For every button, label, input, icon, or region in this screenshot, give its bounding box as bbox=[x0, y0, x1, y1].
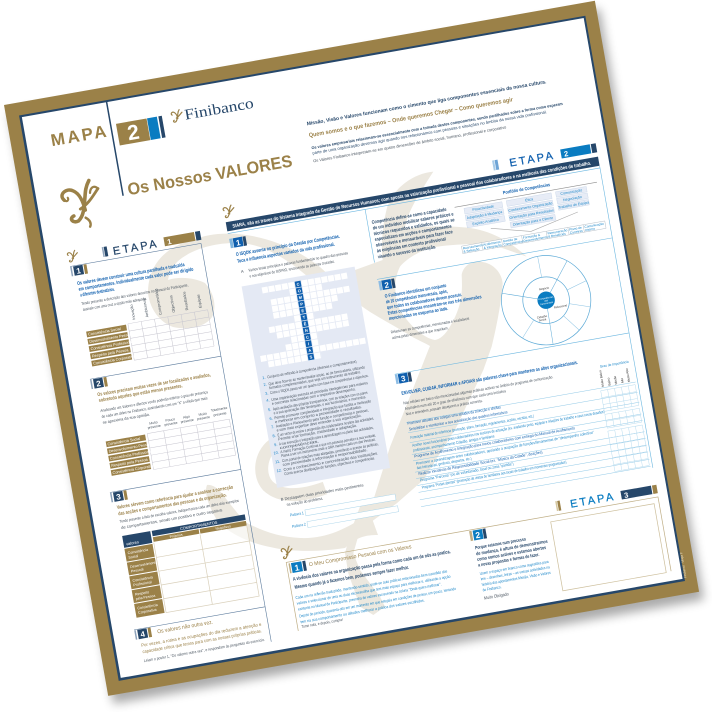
crossword clues: Com o conhecimento e concretização das instituições. bbox=[283, 450, 379, 472]
row labels bbox=[86, 324, 137, 367]
crossword clues: Conjunto de reflexão à competência (diversas e comportamentos) bbox=[267, 359, 357, 379]
panel: competences section 2: Relacionam as competências, mencionadas e localizáveis bbox=[390, 316, 470, 334]
etapa 1 header: 1 bbox=[166, 237, 172, 246]
presence column headers: Muito bbox=[198, 411, 207, 417]
panel: etapa 1 section 3: Valores sérvem como referência para ajudar a analisar a correcção bbox=[116, 485, 234, 511]
question B and keyword fields: Palavra 2 bbox=[292, 521, 307, 529]
panel: etapa 1 section 1: 1 bbox=[76, 266, 82, 276]
panel: personal commitment: tem na sua comportamento ou atitudes melhorar a prática dos valores escolhidos. bbox=[300, 598, 425, 624]
panel: etapa 1 section 4: capacidade crítica que temos para com as nossas próprias práticas. bbox=[142, 628, 262, 654]
panel: glossary crossword: e nos objectivos do SISPRO, rescrevendo as palavras cruzadas. bbox=[249, 259, 335, 279]
panel: glossary crossword: Toca e influencia aspectos variados da vida profissional. bbox=[237, 242, 336, 265]
chart: competence wheel: transversais bbox=[540, 301, 554, 306]
panel: personal commitment: 1 bbox=[294, 562, 300, 573]
crossword clues: Permite criar formação, criatividade e adaptação. bbox=[278, 423, 357, 441]
portfolio box labels: Orientação para o Cliente bbox=[512, 216, 553, 227]
column labels: Resultados bbox=[182, 291, 189, 311]
column labels: Ambiciosos bbox=[142, 298, 150, 318]
presence column headers: presente bbox=[147, 424, 161, 430]
panel: etapa 1 section 4 bbox=[134, 608, 265, 664]
crossword letters: T bbox=[302, 314, 306, 320]
header: mapa label: MAPA bbox=[49, 122, 108, 150]
competence definition text: técnicos requeridos e validados, os quais se bbox=[373, 217, 455, 237]
row labels: Consistência Corporativa bbox=[112, 464, 156, 475]
crossword clues: Passa a ser um instrumento onde a GRH mantém cada um das Pessoas. bbox=[281, 437, 376, 458]
panel: etapa 1 section 1: em comportamentos. Individualmente cada valor pode ser dirigido bbox=[78, 267, 194, 293]
panel: personal commitment: O Meu Compromisso Pessoal com os Valores bbox=[309, 544, 412, 568]
behaviours table: COMPORTAMENTOS bbox=[180, 521, 218, 531]
panel: etapa 1 section 4: Leiam o poster 1, "Os valores outra vez", e respondam às perguntas do exercício. bbox=[143, 637, 265, 663]
chart: competence portfolio: Comunicação bbox=[584, 222, 604, 229]
panel: etapa 1 section 4: Os valores não outra vez. bbox=[157, 620, 214, 635]
header divider bbox=[106, 101, 124, 196]
panel: glossary crossword: 1 bbox=[235, 238, 242, 248]
panel: etapa 1 section 3: 3 bbox=[116, 492, 122, 502]
panel: section 3 importance grid: Nos e entendem, possam desejarem a prática concreta. bbox=[405, 398, 483, 416]
competence definition text: Competência define-se como a capacidade bbox=[371, 207, 447, 226]
crossword clues: 11. bbox=[275, 458, 281, 464]
portfolio box labels: Adaptação à Mudança bbox=[466, 210, 502, 220]
practice list: Acolher novos funcionários pelos colaboradores nos sectores de actuação (ex. avaliando perto, equipas e relações de trabalho e seus novos desafios) bbox=[412, 409, 605, 448]
panel: personal commitment: Mesmo quando já o fazemos bem, podemos sempre fazer melhor. bbox=[294, 565, 410, 591]
panel: closing message: como somos activos e estamos abertos bbox=[477, 545, 547, 562]
panel: etapa 1 section 2: sobretudo aqueles que estão menos presentes. bbox=[98, 383, 184, 404]
row labels: Desenvolvimento Pessoal bbox=[108, 442, 152, 454]
crossword letters: I bbox=[308, 341, 310, 346]
panel: section 3 importance grid: ENVOLVER, CUIDAR, INFORMAR e APOIAR são palavras chave para manterem os altos organizacionais. bbox=[401, 360, 579, 397]
competence definition text bbox=[371, 206, 459, 260]
title: Os Nossos VALORES bbox=[126, 151, 294, 199]
chart: competence portfolio: Desenvolvimento bbox=[523, 235, 548, 243]
HR process tabs bbox=[461, 221, 606, 254]
panel: etapa 1 section 2 bbox=[90, 357, 236, 478]
chart: competence portfolio: Portfólio de Competências bbox=[502, 182, 551, 195]
presence column headers: Algo bbox=[183, 414, 190, 420]
panel: etapa 1 section 3 bbox=[110, 471, 259, 619]
panel: competences section 2: O Finibanco identificou um conjunto bbox=[384, 283, 447, 300]
crossword letters: A bbox=[308, 348, 312, 353]
crossword clues: Conta acerca distribuição de funções, objectivos e competências. bbox=[284, 455, 375, 476]
chart: competence wheel bbox=[494, 248, 598, 352]
panel: closing message bbox=[469, 518, 556, 601]
panel: personal commitment: Cada um na reflexão traduzindo, mantendo-sentido, pode-se auto práticas relacionadas bem sucedido dos bbox=[295, 568, 448, 600]
practice list: das hierarquias, gerência, desportos, etc.) bbox=[416, 456, 472, 470]
panel: closing message: Porque estamos num processo bbox=[475, 537, 526, 550]
panel: closing message: história dos apontamentos Missão, Visão e Valores bbox=[481, 570, 551, 587]
panel: glossary crossword: Vamos testar princípios e palavras fundamentais no quadro das pessoas bbox=[248, 250, 348, 273]
competence definition text: especializam em acções e comportamentos bbox=[374, 224, 452, 243]
crossword background bbox=[242, 267, 390, 488]
panel: personal commitment: valores e seleccionar de uma ou duas microrecolha que tem mais espaço para melhorar e, utilizando a opção bbox=[296, 574, 451, 606]
crossword letters: C bbox=[306, 334, 309, 340]
etapa 2 band: SIARA, são as traves do Sistema Integrado de Gestão de Recursos Humanos; com aposta na valorização profissional e pessoal dos colaboradores e na melhoria das condições de trabalho. bbox=[232, 161, 592, 230]
intro text block bbox=[306, 77, 566, 163]
panel: section 3 importance grid: Médio bbox=[613, 375, 618, 385]
chart: competence wheel: Relacional bbox=[554, 303, 568, 310]
crossword clues: 2. bbox=[263, 382, 267, 387]
panel: section 3 importance grid bbox=[395, 334, 651, 507]
practice list: Promover a aprendizagem entre colaboradores, apoiando a ocupação de funções/ferramentas de "desempenho colectivo" bbox=[416, 430, 595, 466]
panel: personal commitment: Tome nota, e depois, cumpra! bbox=[301, 617, 343, 629]
panel: section 3 importance grid: Assinalem num até 20 o grau de eficiência com que cada uma iniciativa bbox=[404, 388, 507, 411]
row labels: Consistência Social bbox=[88, 327, 121, 337]
intro text block: Quem somos e o que fazemos – Onde queremos Chegar – Como queremos agir bbox=[309, 97, 514, 139]
panel: section 3 importance grid: Nas células em baixo são mencionadas algumas práticas activas no âmbito do programa de comunicação. bbox=[403, 374, 554, 405]
rating cells bbox=[601, 385, 649, 471]
crossword clues: 12. bbox=[276, 467, 282, 473]
column labels: Objectivos bbox=[169, 295, 176, 313]
presence column headers: Totalmente bbox=[211, 406, 228, 413]
practice list: Programa de Acolhimento e Integração para novos colaboradores com entrega do Manual de Acolhimento bbox=[414, 425, 576, 459]
behaviours table: Consistência bbox=[132, 575, 153, 583]
panel: section 3 importance grid: Alto bbox=[620, 377, 625, 384]
panel: etapa 1 section 2: Os valores precisam muitas vezes de ser focalizados e avaliados, bbox=[97, 372, 212, 398]
panel: competences section 2: 2 bbox=[384, 280, 390, 290]
chart: competence wheel: Cidadão bbox=[536, 314, 548, 320]
panel: etapa 1 section 2: de cada um deles no Finibanco, assinalando com um "X" a célula que mais bbox=[101, 395, 208, 419]
portfolio box labels: Comunicação bbox=[560, 188, 583, 196]
column labels bbox=[128, 281, 203, 320]
panel: etapa 1 section 3: Tendo presente a lista de escolha valores, indiquem para cada um deles dois exemplos bbox=[119, 498, 239, 524]
panel: competences section 2 bbox=[378, 264, 487, 341]
grau de importancia header: Grau de Importância bbox=[600, 360, 629, 369]
practice list: Formação material de referência (promoção, plano, formação, regulamentos, acções, escritas, etc.) bbox=[410, 413, 535, 440]
panel: closing message: de mudança, é altura de demonstrarmos bbox=[476, 539, 548, 556]
crossword clues: 8. bbox=[272, 433, 276, 438]
portfolio box labels: Proactividade bbox=[472, 204, 494, 212]
panel: competences section 2: acima pelas dimensões a que respeitam. bbox=[392, 325, 449, 340]
panel: personal commitment: A vivência dos valores na organização passa pela forma como cada um de nós as pratica. bbox=[293, 549, 452, 583]
intro text block: parte de uma organização devemos agir quando nos relacionamos com pessoas e situações no âmbito da nossa vida profissional. bbox=[312, 109, 547, 155]
left column divider bbox=[70, 243, 271, 665]
column labels: Comprometidos bbox=[154, 288, 163, 315]
portfolio box labels bbox=[465, 187, 591, 235]
panel: etapa 1 section 2: Analisando um Valores e dilectos vocês poderão estimar o grau de presença bbox=[100, 389, 209, 413]
etapa 3 header: 3 bbox=[623, 490, 629, 500]
chart: competence portfolio: & Integração bbox=[483, 243, 502, 250]
crossword clues: Permite promover complexidade e integração que facilita a motivação bbox=[274, 398, 371, 420]
icon: large ornament bbox=[60, 179, 104, 230]
row labels: Consistência Profissional bbox=[110, 449, 152, 461]
panel: competences section 2: de 10 competências transversais, após, bbox=[385, 289, 449, 305]
presence grid bbox=[147, 419, 236, 470]
practice list: Programa "Parceria" (ou de voluntariado, local ou zona "partida") bbox=[419, 461, 514, 482]
vertical credit: Finibanco · Mapa 2 bbox=[679, 552, 687, 578]
behaviours table: Desenvolvimento bbox=[130, 560, 158, 569]
etapa 2 header bbox=[492, 142, 598, 173]
panel: closing message: Muito Obrigado bbox=[484, 591, 509, 601]
panel: etapa 1 section 2: se aproxima da sua opinião. bbox=[102, 412, 150, 425]
panel: etapa 1 section 1: Os valores devem construir uma cultura partilhada e traduzida bbox=[77, 262, 185, 287]
notes box bbox=[551, 504, 666, 591]
panel: closing message: a novas propostas e formas de fazer. bbox=[478, 552, 540, 568]
crossword letters bbox=[296, 281, 314, 360]
crossword letters: O bbox=[297, 288, 301, 293]
portfolio boxes bbox=[464, 186, 591, 235]
chart: competence portfolio: Acolhimento bbox=[483, 240, 501, 247]
question B and keyword fields: na solução do problema. bbox=[286, 496, 324, 507]
practice list: Sensibilizar e monitorizar a sua actualização dos quadros informativos bbox=[408, 409, 508, 432]
panel: etapa 1 section 3: de comportamentos, sendo um positivo e outro negativo. bbox=[121, 507, 224, 530]
chart: competence wheel: Social bbox=[538, 317, 547, 322]
intro text block: Missão, Visão e Valores funcionam como o cimento que liga componentes essenciais da nossa cultura. bbox=[306, 79, 547, 127]
chart: competence portfolio: Interna bbox=[585, 227, 595, 232]
question B and keyword fields: B bbox=[280, 496, 284, 502]
crossword clues: Que deve ficar-se ao manter/avaliar acçao, ao de forma aberta, utilizando bbox=[268, 364, 365, 386]
presence column headers: presente bbox=[213, 411, 227, 417]
crossword clues: 7. bbox=[271, 424, 275, 429]
crossword clues: 6. bbox=[269, 416, 273, 421]
crossword clues: 3. bbox=[265, 391, 269, 396]
portfolio box labels: Espírito Analítico bbox=[472, 218, 499, 226]
panel: etapa 1 section 2: 2 bbox=[96, 379, 102, 389]
crossword clues: Uma organização executa as principais intelegências para maiores bbox=[271, 380, 368, 402]
panel: closing message: ime – desenhos, letras – as vossas actividades na bbox=[480, 564, 551, 581]
chart: competence portfolio: Competências bbox=[503, 239, 524, 247]
chart: competence portfolio bbox=[453, 174, 606, 254]
behaviours table bbox=[122, 514, 259, 618]
etapa 2 header: 2 bbox=[563, 149, 569, 159]
panel: closing message: do Finibanco. bbox=[482, 584, 502, 592]
row labels: Desenvolvimento Pessoal bbox=[89, 332, 133, 344]
header: number badge: 2 bbox=[126, 121, 141, 145]
row labels: Consistência Corporativa bbox=[93, 354, 136, 366]
row labels: Consistência Social bbox=[107, 437, 141, 446]
portfolio box labels: Conhecimento Organização bbox=[508, 201, 553, 213]
crossword cells bbox=[249, 274, 367, 366]
presence column headers: presente bbox=[197, 415, 210, 421]
panel: etapa 1 section 1: assinale com uma cruz a opção mais adequada. bbox=[82, 296, 147, 312]
chart: competence portfolio: & Benefícios bbox=[548, 232, 567, 239]
panel: glossary crossword bbox=[229, 218, 399, 532]
panel: glossary crossword: A bbox=[241, 268, 244, 274]
etapa 1 header bbox=[102, 230, 202, 260]
panel: personal commitment: Depois do período, quarenta-oito em um momento em que esteja/a em condições de pensar, em pouco, tentando bbox=[299, 586, 457, 618]
crossword answer column bbox=[298, 281, 311, 360]
column labels: Inovação bbox=[130, 304, 136, 320]
panel: etapa 1 section 4: Por vezes, a rotina e as ocupações do dia reduzem a atenção e bbox=[141, 622, 262, 648]
crossword clues: Após avaliação das próprias transparência, com as relações com os pares bbox=[272, 390, 368, 411]
presence column headers: presente bbox=[164, 421, 178, 427]
behaviours table: Consistência bbox=[127, 548, 148, 555]
crossword letters: C bbox=[296, 281, 300, 287]
behaviours table: Social bbox=[128, 554, 139, 560]
chart: competence portfolio: Carreiras bbox=[569, 229, 583, 235]
panel: personal commitment bbox=[288, 535, 460, 629]
behaviours table: Próprios bbox=[169, 533, 183, 539]
crossword clues: É um vector de ensino e progressão dos colaboradores no plano das actividades. bbox=[277, 416, 374, 437]
chart: competence portfolio: Gestão de bbox=[503, 237, 518, 243]
crossword clues: 10. bbox=[273, 450, 279, 455]
chart: competence portfolio: Remuneração bbox=[547, 228, 568, 236]
watermark: large beige ornament bbox=[148, 172, 527, 615]
row separators bbox=[406, 382, 651, 507]
icon: Finibanco ornament bbox=[171, 109, 183, 122]
behaviours table: Consistência bbox=[137, 603, 158, 610]
panel: section 3 importance grid: 3 bbox=[400, 374, 407, 384]
chart: competence portfolio: Formação & bbox=[523, 233, 541, 240]
behaviours table: Corporativa bbox=[138, 608, 157, 615]
crossword clues: 9. bbox=[274, 442, 278, 447]
crossword clues: e concretas relacionadas com o respectivo desempenho. bbox=[271, 386, 356, 406]
wheel spokes bbox=[497, 249, 596, 352]
chart: competence portfolio: & Selecção bbox=[463, 247, 480, 254]
competence definition text: visando o sucesso da instituição. bbox=[377, 244, 437, 260]
presence column headers: presente bbox=[180, 418, 194, 424]
behaviours table: Respeito bbox=[135, 590, 149, 597]
behaviours table: Negativos bbox=[215, 524, 231, 531]
practice list: profissionais, acompanhamento Cidadão, amigos e familiares bbox=[413, 433, 495, 453]
divider bbox=[90, 356, 265, 630]
portfolio box labels: Ética bbox=[525, 196, 533, 203]
etapa 3 frame bbox=[286, 497, 671, 637]
panel: section 3 importance grid: Baixo bbox=[606, 377, 612, 386]
crossword clues: Como o ISQDK passa ser um quadro com base em competências e objectivos. bbox=[270, 373, 369, 395]
practice list: Programa "Portas abertas" (promoção de visitas de familiares aos locais de trabalho em momentos programados) bbox=[421, 459, 567, 490]
column labels: Equipas bbox=[196, 294, 203, 308]
row labels bbox=[106, 434, 156, 476]
crossword letters: Ê bbox=[303, 321, 307, 327]
etapa 1 header: ETAPA bbox=[112, 238, 158, 258]
crossword letters: E bbox=[301, 308, 305, 313]
crossword letters: N bbox=[304, 328, 308, 333]
panel: glossary crossword: O ISQDK assente no princípio da Gestão por Competências. bbox=[235, 234, 341, 258]
practice list bbox=[407, 387, 613, 490]
crossword clues: e com mais expertise deve entender a sua organização. bbox=[276, 413, 362, 433]
chart: competence wheel: das bbox=[544, 299, 549, 303]
behaviours table: pela Pessoa bbox=[135, 594, 156, 601]
panel: competences section 2: que todos os colaboradores devem possuir. bbox=[386, 292, 462, 311]
row labels: Consistência Profissional bbox=[90, 340, 133, 351]
question B and keyword fields bbox=[280, 477, 399, 531]
matching grid bbox=[128, 310, 214, 360]
icon: small ornament bbox=[223, 205, 235, 218]
chart: competence wheel: Competências bbox=[538, 295, 554, 301]
panel: section 3 importance grid: Muito Baixo bbox=[598, 370, 605, 387]
crossword clues: e a sua apreciação das hierarquias, e aos funcionários, e momentos. bbox=[273, 394, 367, 415]
portfolio connector bbox=[491, 212, 580, 238]
practice list: Promover atitudes dos colegas uma atitudes da Direcção e chefias bbox=[407, 404, 501, 426]
panel: closing message: Usem o espaço em branco como sugestões para bbox=[479, 559, 550, 576]
chart: competence portfolio: Recrutamento bbox=[463, 243, 483, 250]
behaviours table: Pessoal bbox=[131, 567, 144, 574]
wheel labels: Negócio bbox=[539, 286, 550, 291]
panel: section 3 importance grid: Muito Alto bbox=[625, 368, 631, 383]
presence column headers: Pouco bbox=[165, 417, 175, 423]
crossword clues: 4. bbox=[266, 397, 270, 403]
icon: small ornament bbox=[281, 546, 293, 559]
behaviours table: valores bbox=[126, 539, 139, 546]
row labels: Respeito pela Pessoa bbox=[111, 458, 149, 468]
panel: closing message: 2 bbox=[475, 530, 481, 540]
chart: competence portfolio: Plano de bbox=[569, 226, 582, 232]
crossword clues: e melhorar em conjunto a proximidade e resultados. bbox=[275, 404, 362, 424]
portfolio box labels: Orientação para Resultados bbox=[509, 208, 554, 220]
competence definition text: observáveis e mensuráveis para fazer face bbox=[375, 229, 453, 249]
panel: etapa 1 section 3: das acções e comportamentos das pessoas e da organização. bbox=[118, 492, 228, 517]
question B and keyword fields: Destaquem duas prioridades mais pertinentes bbox=[284, 482, 364, 501]
etapa 2 header: ETAPA bbox=[509, 150, 555, 170]
panel: competences section 2: mencionadas no esquema ao lado. bbox=[389, 306, 449, 322]
crossword clues: 5. bbox=[268, 407, 272, 412]
panel: etapa 1 section 1: a diferentes destinatários. bbox=[80, 287, 116, 299]
panel: competences section 2: Estas competências encontram-se nas três dimensões bbox=[387, 294, 482, 317]
row labels: Respeito pela Pessoa bbox=[92, 348, 130, 359]
crossword clues: competências. bbox=[279, 438, 320, 450]
wheel hub bbox=[536, 290, 556, 310]
logo: Finibanco: Finibanco bbox=[183, 96, 255, 124]
crossword letters: S bbox=[309, 354, 313, 360]
intro text block: Os Valores Finibanco interpretam-se em quatro dimensões de âmbito social, humano, profissional e corporativo bbox=[313, 124, 507, 163]
crossword clues: com proximidade à informação e responsabilidade. bbox=[282, 447, 368, 467]
panel: etapa 1 section 4: 4 bbox=[140, 630, 146, 639]
etapa 3 header: ETAPA bbox=[569, 491, 615, 511]
question B and keyword fields: Palavra 1 bbox=[290, 510, 305, 518]
crossword clues: formatos complementados, que seja um instrumento de trabalho. bbox=[269, 369, 361, 390]
crossword letters: M bbox=[298, 294, 303, 300]
portfolio box labels: Negociação bbox=[563, 195, 582, 202]
panel: etapa 1 section 1: Tendo presente a descrição dos valores descritos no Manual do Participante, bbox=[81, 282, 189, 306]
crossword clues: Avaliação e Planeamento para função e competências e pessoas, bbox=[275, 407, 369, 429]
presence column headers: Muito bbox=[149, 420, 158, 426]
crossword clues: 1. bbox=[262, 375, 266, 380]
practice list: Realizar iniciativas de Responsabilidade Social (ex. "Música da Cidade", doações) bbox=[418, 449, 543, 476]
etapa 2 rules bbox=[227, 166, 653, 533]
crossword clues: Com portal de relações mais alargadas, permitindo o acesso as políticas, bbox=[282, 441, 379, 463]
header: number badge bbox=[116, 116, 166, 147]
panel: etapa 1 section 1 bbox=[70, 245, 214, 368]
panel: personal commitment: existente no Manual do Participante, preencha de valores escrevendo na coluna "Onde quero melhorar". bbox=[298, 581, 442, 612]
crossword clues bbox=[260, 357, 383, 477]
competence definition text: às exigências em contexto profissional bbox=[376, 236, 446, 254]
icon: small ornament bbox=[67, 250, 79, 262]
etapa 3 header bbox=[555, 484, 658, 513]
presence column headers bbox=[146, 406, 229, 430]
crossword clues: A sua execução e integração para a aprendizagem no plano das actividades, bbox=[279, 425, 374, 446]
crossword letters: P bbox=[300, 301, 304, 307]
competence definition text: de um indivíduo mobilizar saberes práticos e bbox=[372, 211, 454, 232]
portfolio box labels: Trabalho de Equipa bbox=[558, 200, 589, 210]
behaviours table: Profissional bbox=[133, 580, 152, 587]
crossword clues: A matriz Formação Contínua e que em pessoas perceber a sua vontade, bbox=[280, 432, 376, 454]
intro text block: Os valores empresariais relacionam-se essencialmente com a tomada destes componentes, sendo partilhados sobre a forma como esperam bbox=[311, 101, 563, 150]
